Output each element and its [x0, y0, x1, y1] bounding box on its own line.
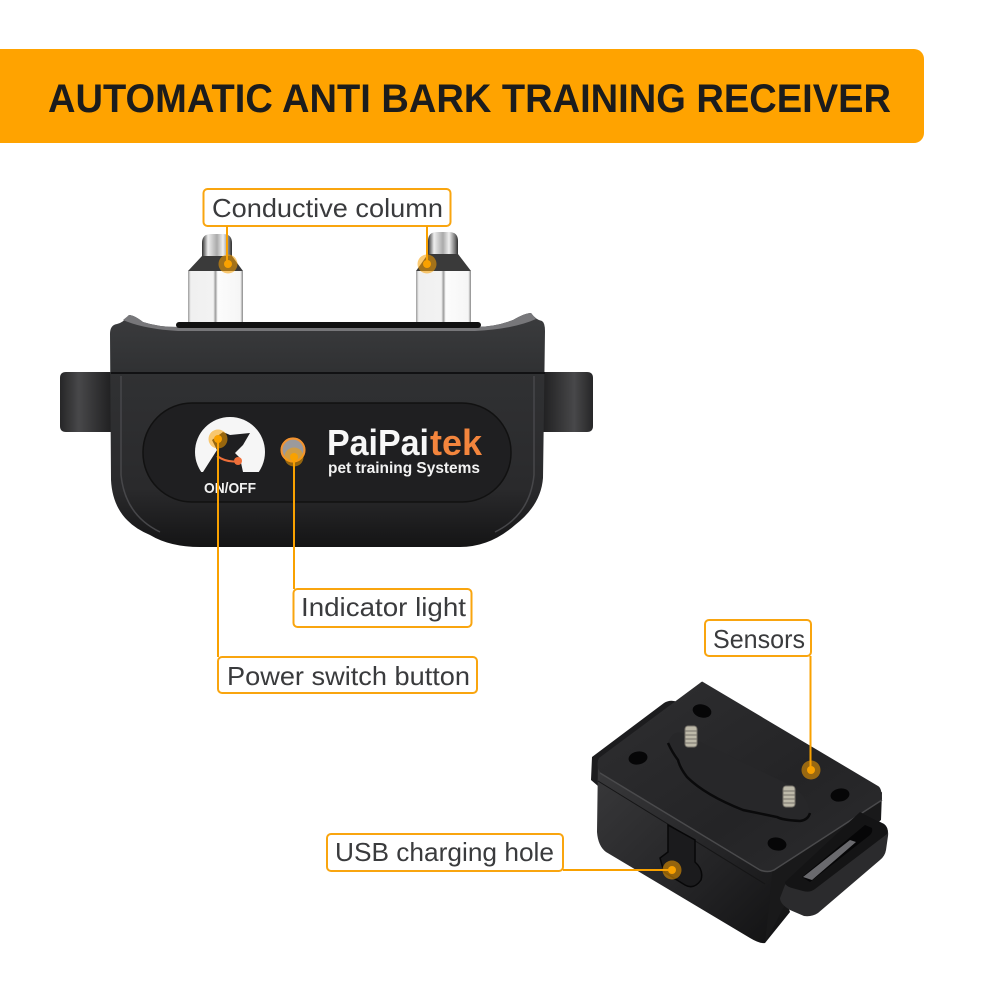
brand logo: tek [430, 422, 483, 463]
icon: dog power button [195, 417, 265, 472]
brand logo [327, 422, 483, 477]
callout: usb charging hole [327, 834, 682, 880]
callout: sensors [705, 620, 820, 780]
right strap loop [540, 372, 593, 432]
mounting holes [628, 702, 850, 852]
right conductive post [416, 232, 471, 322]
callout: conductive column [204, 189, 450, 274]
receiver body [110, 313, 545, 547]
near strap loop [780, 812, 888, 916]
logo panel [143, 403, 511, 502]
callout: indicator light: Indicator light [301, 592, 467, 622]
brand logo: pet training Systems [328, 460, 480, 477]
box front side [597, 760, 790, 943]
callout: power switch button [208, 430, 477, 693]
on/off label: ON/OFF [204, 480, 256, 497]
title: AUTOMATIC ANTI BARK TRAINING RECEIVER [48, 77, 891, 121]
callout: indicator light [284, 448, 472, 627]
box right side [765, 792, 882, 943]
left strap loop [60, 372, 114, 432]
brand logo: PaiPai [327, 422, 429, 463]
sensor plate [668, 732, 810, 821]
callout: usb charging hole: USB charging hole [335, 837, 554, 867]
callout: conductive column: Conductive column [212, 193, 443, 223]
icon: indicator light [280, 437, 306, 463]
callout: sensors: Sensors [713, 624, 805, 654]
usb rubber cover [660, 825, 702, 887]
device: receiver rear view [591, 682, 888, 943]
box top face [598, 682, 882, 871]
callout: power switch button: Power switch button [227, 661, 470, 691]
far strap loop [591, 701, 678, 786]
device: receiver front view [60, 232, 593, 547]
left conductive post [188, 234, 243, 322]
sensor screws [685, 726, 795, 807]
title banner [0, 49, 924, 143]
